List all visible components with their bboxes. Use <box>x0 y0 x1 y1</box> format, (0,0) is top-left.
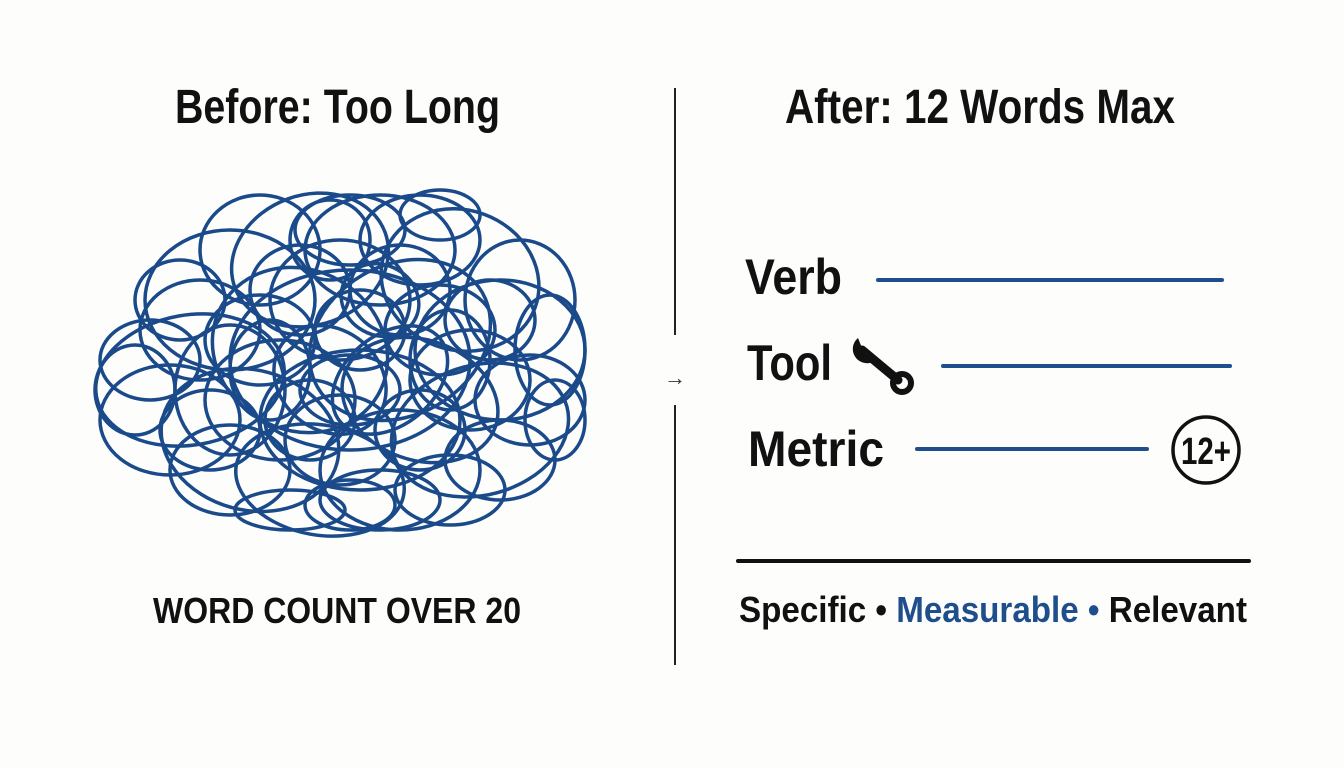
rule <box>738 559 1249 563</box>
title: before: Before: Too Long <box>175 81 500 134</box>
row: metric <box>748 417 1239 483</box>
icon: 12+ badge <box>1173 417 1239 483</box>
row: metric: Metric <box>748 421 884 477</box>
tagline: Specific • Measurable • Relevant <box>739 589 1247 630</box>
caption: word count: WORD COUNT OVER 20 <box>153 590 521 631</box>
icon: 12+ badge: 12+ <box>1181 431 1231 473</box>
row: tool <box>747 335 1230 392</box>
title: after: After: 12 Words Max <box>785 81 1175 134</box>
divider <box>674 88 676 665</box>
arrow: → <box>664 365 686 390</box>
row: tool: Tool <box>747 335 832 391</box>
row: verb: Verb <box>745 249 842 305</box>
scribble tangle <box>85 172 585 549</box>
icon: wrench <box>853 338 911 392</box>
